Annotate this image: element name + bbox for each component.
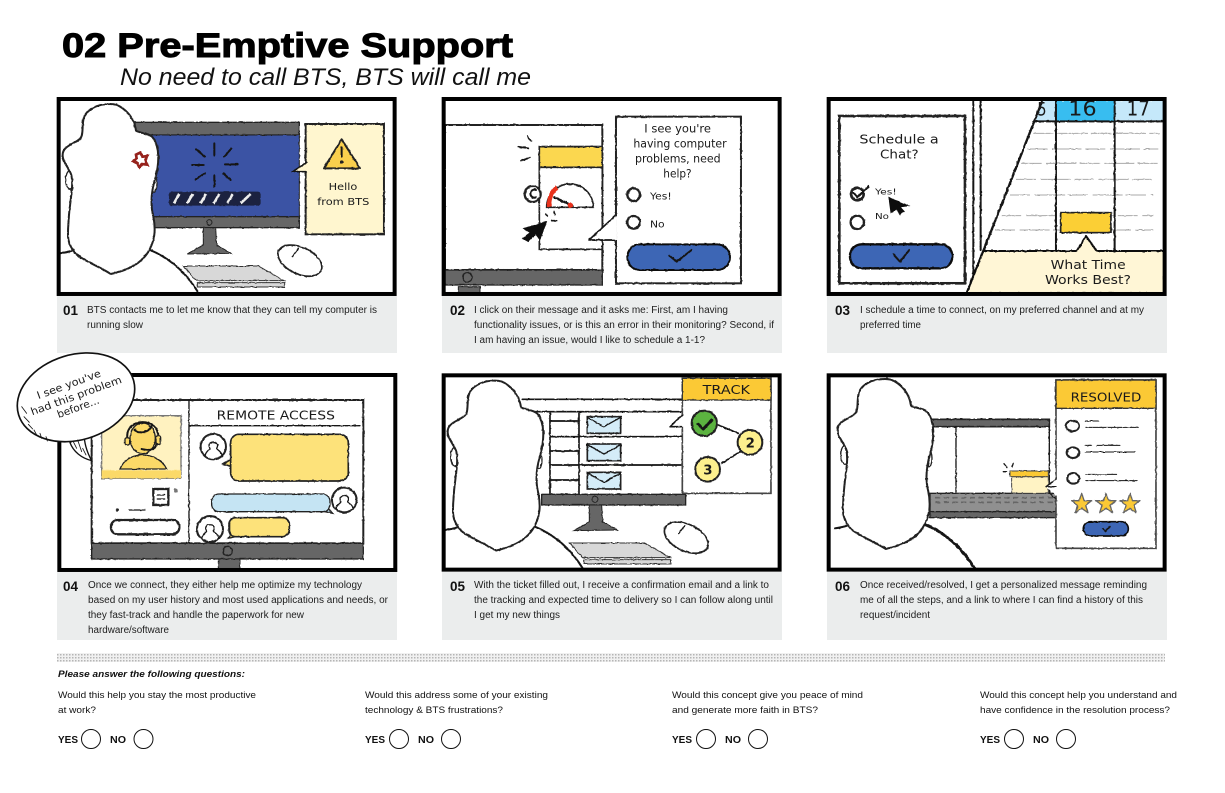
caption text 4: hardware/software: [88, 625, 170, 636]
question 4: NO: [1033, 735, 1049, 746]
illustration 2: having computer: [633, 136, 727, 150]
dotted divider band: [57, 653, 1165, 662]
panel 4: remote access: [6, 339, 397, 640]
panel 2: click on message: [442, 99, 782, 353]
question 2: [365, 689, 548, 748]
caption text 3: 03: [835, 302, 850, 318]
panel 3: schedule a time: [827, 97, 1167, 353]
speech bubble: before...: [56, 395, 101, 421]
caption background 4: [57, 572, 397, 640]
illustration 3: Yes!: [874, 187, 897, 197]
panel 5: tracking: [442, 375, 782, 640]
caption background 3: [827, 296, 1167, 353]
illustration 3: No: [875, 212, 889, 221]
caption text 2: functionality issues, or is this an error in their monitoring? Second, if: [474, 320, 774, 331]
caption text 3: preferred time: [860, 320, 922, 331]
caption text 4: [63, 578, 389, 636]
question 3: and generate more faith in BTS?: [672, 704, 818, 715]
caption text 6: [835, 578, 1147, 621]
caption text 2: I am having an issue, would I like to schedule a 1-1?: [474, 335, 706, 346]
illustration 5: [444, 375, 780, 570]
illustration 1: Hello: [329, 182, 357, 193]
illustration 1: from BTS: [317, 197, 369, 208]
question 4: YES: [980, 735, 1000, 746]
illustration 4: REMOTE ACCESS: [217, 408, 335, 423]
question 2: NO: [418, 735, 434, 746]
illustration 2: problems, need: [635, 151, 721, 165]
question 3: Would this concept give you peace of mind: [672, 689, 863, 700]
caption text 6: Once received/resolved, I get a personalized message reminding: [860, 580, 1147, 591]
caption background 6: [827, 572, 1167, 640]
caption text 5: [450, 578, 773, 621]
illustration 2: Yes!: [649, 191, 672, 202]
caption text 2: 02: [450, 302, 465, 318]
illustration 3: What Time: [1051, 257, 1126, 272]
illustration 2: I see you're: [644, 121, 711, 135]
title: 02 Pre-Emptive Support: [62, 27, 513, 65]
illustration 3: Chat?: [880, 146, 919, 161]
speech bubble: had this problem: [29, 374, 123, 418]
caption text 5: With the ticket filled out, I receive a confirmation email and a link to: [474, 580, 770, 591]
illustration 3: Schedule a: [859, 131, 939, 146]
illustration 2: No: [650, 219, 665, 230]
questions prompt: Please answer the following questions:: [58, 668, 245, 679]
illustration 3: 17: [1127, 97, 1150, 121]
caption background 1: [57, 296, 397, 353]
speech bubble: I see you've: [35, 368, 103, 402]
question 2: YES: [365, 735, 385, 746]
question 3: YES: [672, 735, 692, 746]
illustration 2: help?: [663, 166, 692, 180]
caption text 5: I get my new things: [474, 610, 560, 621]
caption text 3: I schedule a time to connect, on my preferred channel and at my: [860, 305, 1144, 316]
speech bubble: [6, 339, 146, 461]
question 2: Would this address some of your existing: [365, 689, 548, 700]
illustration 6: [829, 375, 1165, 570]
caption text 1: running slow: [87, 320, 144, 331]
illustration 2: [444, 99, 780, 294]
illustration 6: RESOLVED: [1071, 390, 1141, 405]
question 4: Would this concept help you understand and: [980, 689, 1177, 700]
question 2: technology & BTS frustrations?: [365, 704, 503, 715]
question 1: YES: [58, 735, 78, 746]
illustration 3: 5: [1037, 100, 1047, 121]
question 3: NO: [725, 735, 741, 746]
caption text 5: the tracking and expected time to delivery so I can follow along until: [474, 595, 773, 606]
panel 6: resolved: [827, 375, 1167, 640]
caption text 3: [835, 302, 1144, 331]
caption text 6: request/incident: [860, 610, 930, 621]
illustration 3: 16: [1068, 97, 1097, 121]
caption text 2: I click on their message and it asks me: First, am I having: [474, 305, 728, 316]
caption background 2: [442, 296, 782, 353]
caption text 5: 05: [450, 578, 465, 594]
caption text 4: based on my user history and most used applications and needs, or: [88, 595, 389, 606]
illustration 1: [59, 99, 395, 294]
caption text 1: [63, 302, 377, 331]
illustration 3: [829, 97, 1165, 294]
illustration 5: 3: [703, 464, 713, 479]
question 1: [58, 689, 256, 748]
caption text 1: BTS contacts me to let me know that they can tell my computer is: [87, 305, 377, 316]
illustration 5: 2: [746, 437, 755, 452]
question 4: have confidence in the resolution process?: [980, 704, 1170, 715]
question 4: [980, 689, 1177, 748]
question 1: NO: [110, 735, 126, 746]
caption text 2: [450, 302, 774, 346]
illustration 3: Works Best?: [1045, 272, 1131, 287]
panel 1: BTS contacts me: [57, 99, 397, 353]
caption text 1: 01: [63, 302, 78, 318]
illustration 4: [6, 339, 395, 570]
caption text 6: 06: [835, 578, 850, 594]
question 3: [672, 689, 863, 748]
question 1: at work?: [58, 704, 96, 715]
caption text 6: me of all the steps, and a link to where I can find a history of this: [860, 595, 1143, 606]
caption text 4: Once we connect, they either help me optimize my technology: [88, 580, 362, 591]
illustration 5: TRACK: [702, 382, 751, 397]
caption background 5: [442, 572, 782, 640]
question 1: Would this help you stay the most productive: [58, 689, 256, 700]
caption text 4: 04: [63, 578, 78, 594]
subtitle: No need to call BTS, BTS will call me: [120, 64, 531, 91]
caption text 4: they fast-track and handle the paperwork for new: [88, 610, 305, 621]
